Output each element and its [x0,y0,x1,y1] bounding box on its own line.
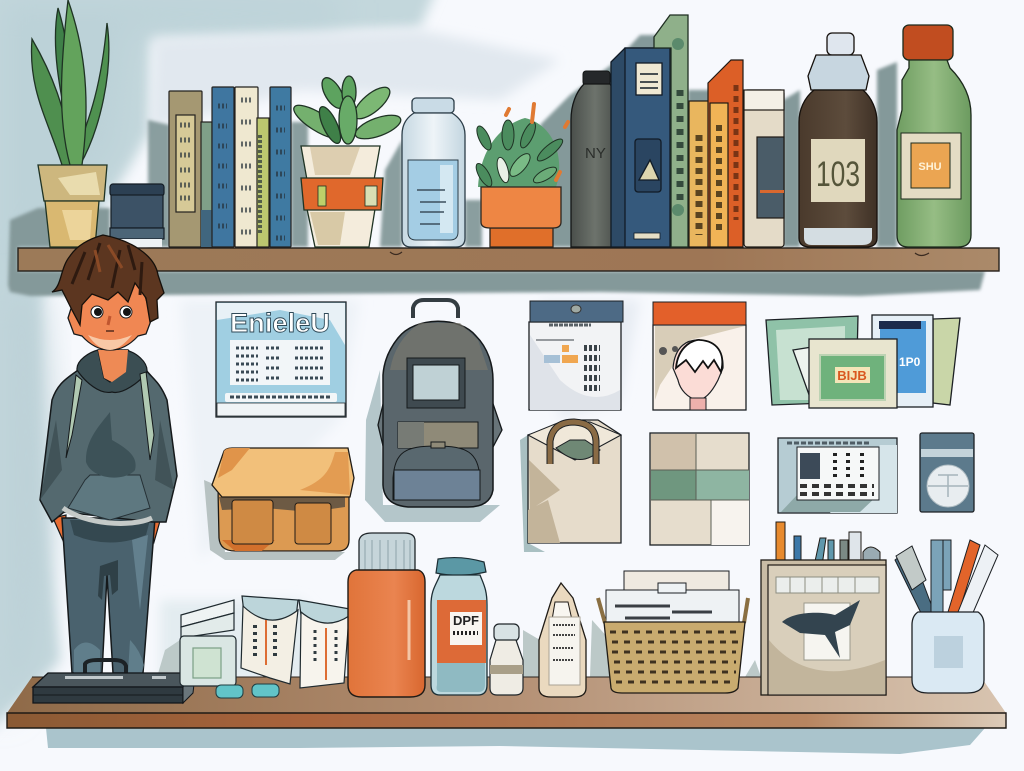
glass jar [402,98,465,247]
calendar with blue header [529,301,623,410]
row of books left [169,87,291,247]
bottom shelf shadow [46,620,985,754]
toolbox [33,660,195,703]
teal jar with label [431,558,487,695]
stack of brochures: BIJB [837,368,867,383]
boy: hoodie [40,350,177,522]
pen cup with tools [895,540,998,693]
medicine jar and pouches [180,596,350,688]
small sealed packet [920,433,974,512]
snake plant in tan pot [31,0,109,247]
dark jar [110,184,164,247]
navy book [611,48,670,247]
stack of brochures [766,315,960,408]
small white bottle [490,624,523,695]
blue poster with title: EnieleU [230,308,330,338]
top shelf [18,248,999,271]
stack of brochures: 1P0 [899,355,921,369]
potted succulent with orange band [289,74,404,247]
boy character [40,235,177,673]
small data panel [778,438,897,513]
green bottle with orange cap [897,25,971,247]
green bottle with orange cap: SHU [918,161,942,173]
plant in orange pot [473,104,568,247]
cream container [744,90,784,247]
folded colour box panel [650,433,749,545]
paper tote bag [520,420,621,552]
boy: hair [52,235,164,325]
top shelf shadow and shadows behind items [8,35,985,296]
blue poster with title [216,302,346,417]
brown bottle labelled 103: 103 [816,155,860,194]
teal jar with label: DPF [453,613,479,628]
box with whale card [761,560,886,695]
tan and orange books [689,60,743,247]
dark bottle: NY [585,145,606,162]
boy: backpack straps [66,372,154,460]
brown bottle labelled 103 [799,33,877,247]
teal pills [216,684,279,698]
calendar with face portrait [653,302,746,410]
orange flap satchel [204,448,354,560]
dark bottle [571,71,619,247]
wicker basket with papers [598,571,748,693]
boy: head [68,280,152,350]
boy: legs [62,518,155,673]
bottom shelf [7,677,1006,728]
boy: hands [53,514,162,545]
green book [654,15,688,247]
backpack [365,300,502,522]
orange bottle [348,533,425,697]
cream jug [539,583,586,697]
pencils behind box [776,522,880,566]
